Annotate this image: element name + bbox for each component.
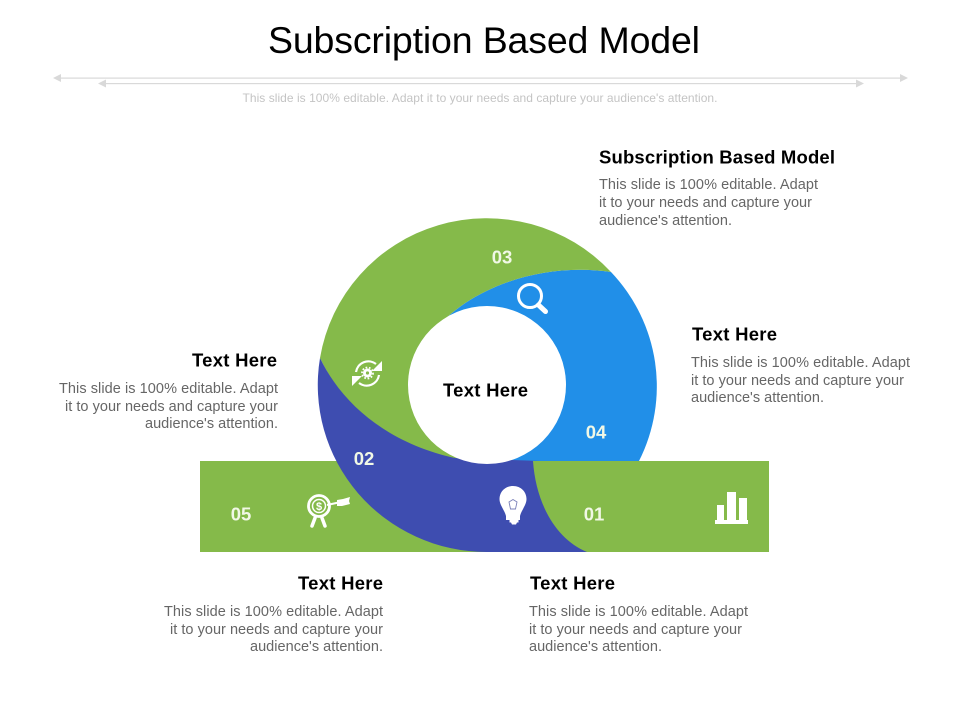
text block: right: Text Here [692,324,777,344]
icon: bar chart [715,492,748,524]
segment 02: indigo ring [318,358,590,552]
text block: Subscription Based Model: This slide is 100% editable. Adapt [599,177,818,193]
text block: bottom left: Text Here [298,572,383,594]
icon: light bulb [500,486,526,524]
center label: Text Here [443,380,528,400]
number 02: 02 [354,448,374,469]
text block: bottom right: This slide is 100% editable. Adapt [529,604,748,620]
text block: left: audience's attention. [145,416,278,432]
diagram [200,218,769,552]
text block: Subscription Based Model [599,146,835,229]
text block: bottom left: audience's attention. [250,639,383,655]
text block: bottom left [164,572,383,655]
text block: right: This slide is 100% editable. Adapt [691,355,910,371]
number 04: 04 [586,422,607,442]
text block: left: it to your needs and capture your [65,399,278,415]
segment 01: right green band [533,461,769,552]
text block: left [59,350,278,432]
text block: right [691,324,910,406]
center circle [408,306,566,464]
number 03: 03 [492,246,512,268]
number 01: 01 [584,504,604,524]
text block: bottom right [529,572,748,655]
subtitle: This slide is 100% editable. Adapt it to your needs and capture your audience's attention. [242,91,718,105]
number 05: 05 [231,504,251,524]
text block: bottom left: This slide is 100% editable. Adapt [164,604,383,620]
header arrows [53,74,908,88]
segment 04: blue ring [430,270,657,461]
text block: right: audience's attention. [691,390,824,406]
icon: magnifier [518,284,546,312]
text block: right: it to your needs and capture your [691,373,904,389]
text block: bottom right: audience's attention. [529,639,662,655]
icon: target with dart [308,496,350,526]
text block: Subscription Based Model: Subscription Based Model [599,146,835,168]
text block: Subscription Based Model: audience's attention. [599,213,732,229]
text block: bottom right: it to your needs and capture your [529,622,742,638]
icon: target with dart: $ [316,501,322,513]
text block: Subscription Based Model: it to your needs and capture your [599,195,812,211]
text block: bottom right: Text Here [530,572,615,594]
title: Subscription Based Model [268,19,700,61]
segment 03: green ring [320,218,611,470]
text block: bottom left: it to your needs and capture your [170,622,383,638]
icon: gear with cycle arrows [352,361,382,386]
text block: left: Text Here [192,350,277,370]
segment 05: left green band [200,461,490,552]
text block: left: This slide is 100% editable. Adapt [59,381,278,397]
